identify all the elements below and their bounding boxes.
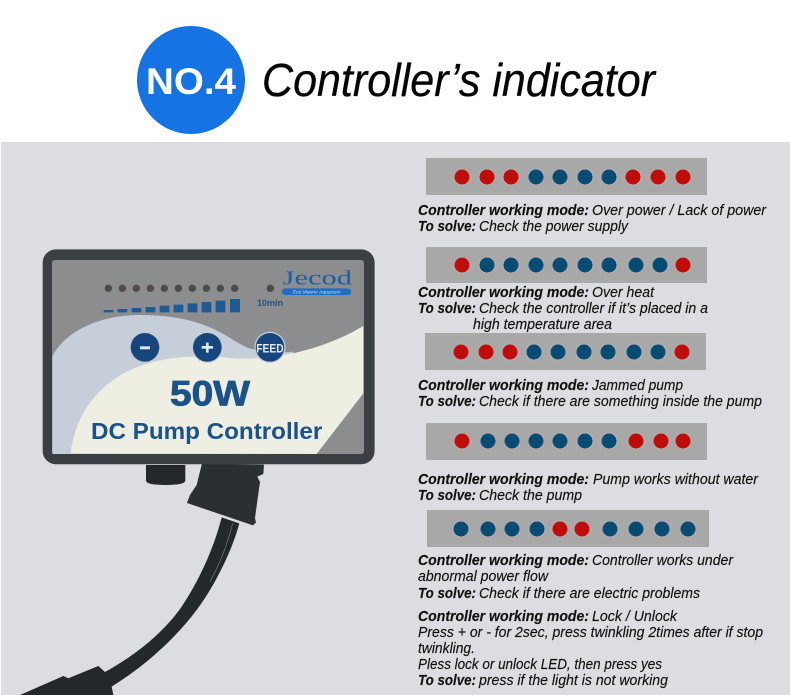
mode text 6: lock and unlock: Controller working mode: xyxy=(418,608,589,625)
mode text 5: To solve: xyxy=(418,585,476,602)
indicator bar 5 xyxy=(427,510,709,547)
50W label: 50W xyxy=(170,374,251,413)
mode text 2: To solve: xyxy=(418,300,476,317)
Jecod logo: Eco Marine Aquarium xyxy=(293,289,341,295)
cream wave xyxy=(71,326,363,454)
mode text 1: Check the power supply xyxy=(479,218,629,235)
mode text 3: Controller working mode: xyxy=(418,377,589,394)
mode text 2 xyxy=(418,284,708,333)
feed button: FEED xyxy=(256,342,284,356)
mode text 6: lock and unlock: Pless lock or unlock LED, then press yes xyxy=(418,656,662,673)
mode text 5: Controller works under xyxy=(592,552,734,569)
indicator bar 4 xyxy=(426,423,707,460)
plus button xyxy=(192,332,223,363)
indicator bar 3 xyxy=(425,333,706,370)
mode text 4: Check the pump xyxy=(479,487,582,504)
mode text 4: To solve: xyxy=(418,487,476,504)
mode text 3: To solve: xyxy=(418,393,476,410)
cable and connector xyxy=(20,463,264,695)
mode text 1 xyxy=(418,202,767,235)
mode text 6: lock and unlock: Press + or - for 2sec, press twinkling 2times after if stop xyxy=(418,624,763,641)
title: Controller’s indicator xyxy=(262,54,657,106)
mode text 3 xyxy=(418,377,762,410)
feed button xyxy=(254,332,286,363)
mode text 6: lock and unlock xyxy=(418,608,763,689)
mode text 6: lock and unlock: Lock / Unlock xyxy=(592,608,678,625)
mode text 5: Controller working mode: xyxy=(418,552,589,569)
minus button xyxy=(129,332,161,363)
mode text 2: high temperature area xyxy=(473,316,612,333)
10min label: 10min xyxy=(257,298,283,308)
mode text 4: Controller working mode: xyxy=(418,471,589,488)
mode text 2: Check the controller if it’s placed in a xyxy=(479,300,708,317)
mode text 6: lock and unlock: twinkling. xyxy=(418,640,475,657)
mode text 1: Over power / Lack of power xyxy=(592,202,767,219)
light blue wave xyxy=(52,315,293,454)
indicator bar 1 xyxy=(426,158,707,195)
mode text 2: Over heat xyxy=(592,284,655,301)
power level bars xyxy=(104,299,240,312)
Jecod logo: Jecod xyxy=(283,268,352,290)
product photo: pump controller xyxy=(20,249,375,695)
controller body xyxy=(43,249,375,464)
mode text 1: Controller working mode: xyxy=(418,202,589,219)
heading: number badge: NO.4 xyxy=(146,61,236,102)
heading: number badge xyxy=(137,26,245,134)
indicator LEDs xyxy=(105,285,274,292)
mode text 5 xyxy=(418,552,734,602)
mode text 5: abnormal power flow xyxy=(418,568,549,585)
indicator bar 2 xyxy=(426,247,707,283)
mode text 6: lock and unlock: To solve: xyxy=(418,672,476,689)
mode text 1: To solve: xyxy=(418,218,476,235)
mode text 6: lock and unlock: press if the light is not working xyxy=(478,672,669,689)
mode text 2: Controller working mode: xyxy=(418,284,589,301)
mode text 4: Pump works without water xyxy=(593,471,759,488)
DC Pump Controller label: DC Pump Controller xyxy=(91,418,322,444)
mode text 4 xyxy=(418,471,759,504)
mode text 3: Jammed pump xyxy=(591,377,683,394)
Jecod logo xyxy=(282,268,352,295)
mode text 3: Check if there are something inside the pump xyxy=(479,393,762,410)
mode text 5: Check if there are electric problems xyxy=(479,585,700,602)
panel: grey background xyxy=(1,142,790,695)
